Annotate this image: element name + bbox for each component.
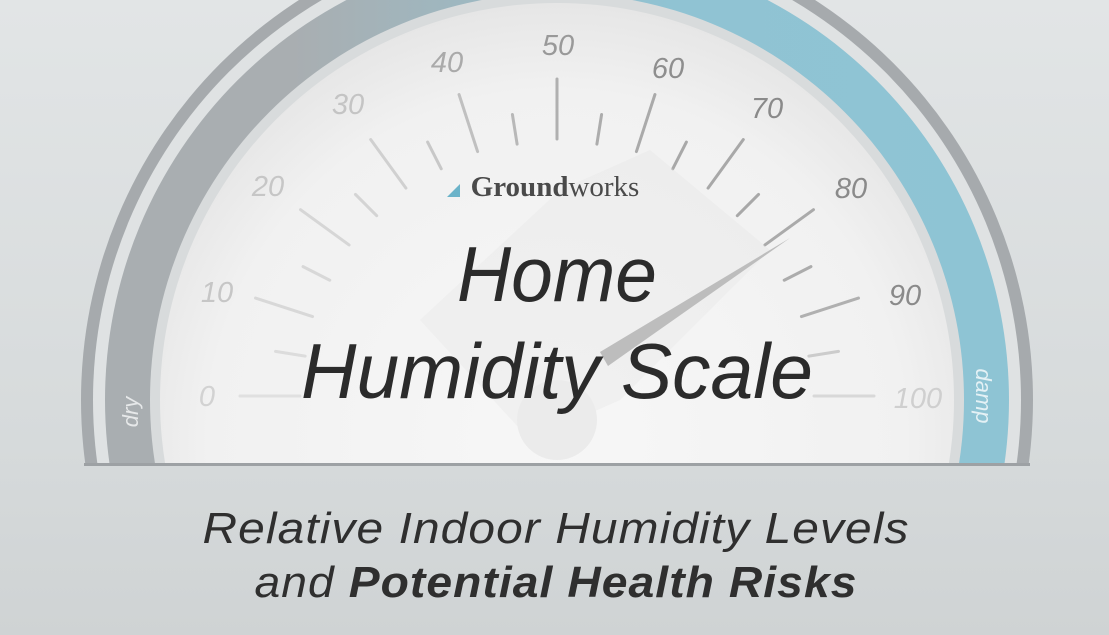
label: damp: damp [971,368,996,424]
scale labels: 80 [835,173,867,205]
scale labels: 100 [894,383,942,415]
subtitle: Relative Indoor Humidity Levels [202,504,910,553]
title [301,230,813,415]
subtitle: and Potential Health Risks [254,558,857,607]
scale labels: 60 [652,53,684,85]
ticks [240,79,874,396]
needle [517,168,789,460]
scale labels: 0 [199,381,215,413]
label: dry: dry [118,395,143,427]
gauge [81,0,1033,463]
gauge bottom edge [84,463,1030,466]
scale labels: 70 [751,93,783,125]
scale labels: 90 [889,280,921,312]
title: Humidity Scale [301,327,813,415]
scale labels: 30 [332,89,364,121]
subtitle [202,504,910,607]
logo: Groundworks [471,171,639,203]
scale labels: 40 [431,47,463,79]
scale labels: 20 [251,171,284,203]
scale labels: 50 [542,30,574,62]
title: Home [457,230,657,318]
scale labels: 10 [201,277,233,309]
scale labels [199,30,942,415]
